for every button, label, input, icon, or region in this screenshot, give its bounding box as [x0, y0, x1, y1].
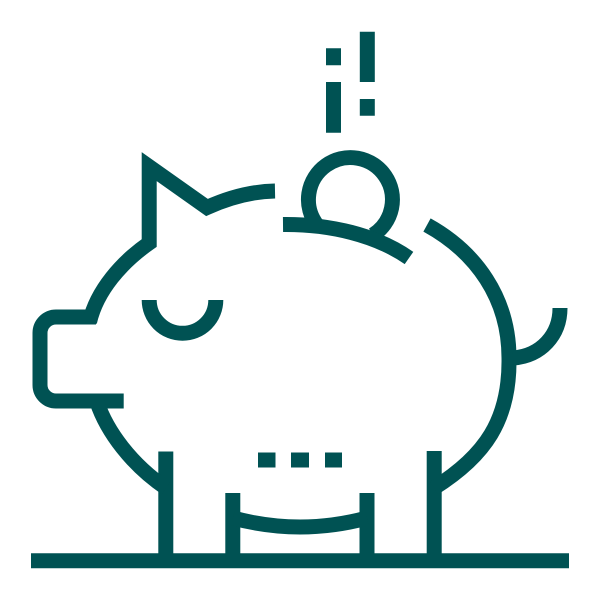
curly tail: [513, 308, 560, 358]
pig legs and belly: [166, 451, 434, 561]
belly dashes: [258, 452, 342, 468]
ground line: [31, 553, 569, 568]
closed eye: [149, 300, 216, 333]
pig body outline with ear and snout: [40, 167, 509, 488]
falling coin motion marks: [334, 32, 367, 133]
coin entering slot: [283, 158, 409, 258]
